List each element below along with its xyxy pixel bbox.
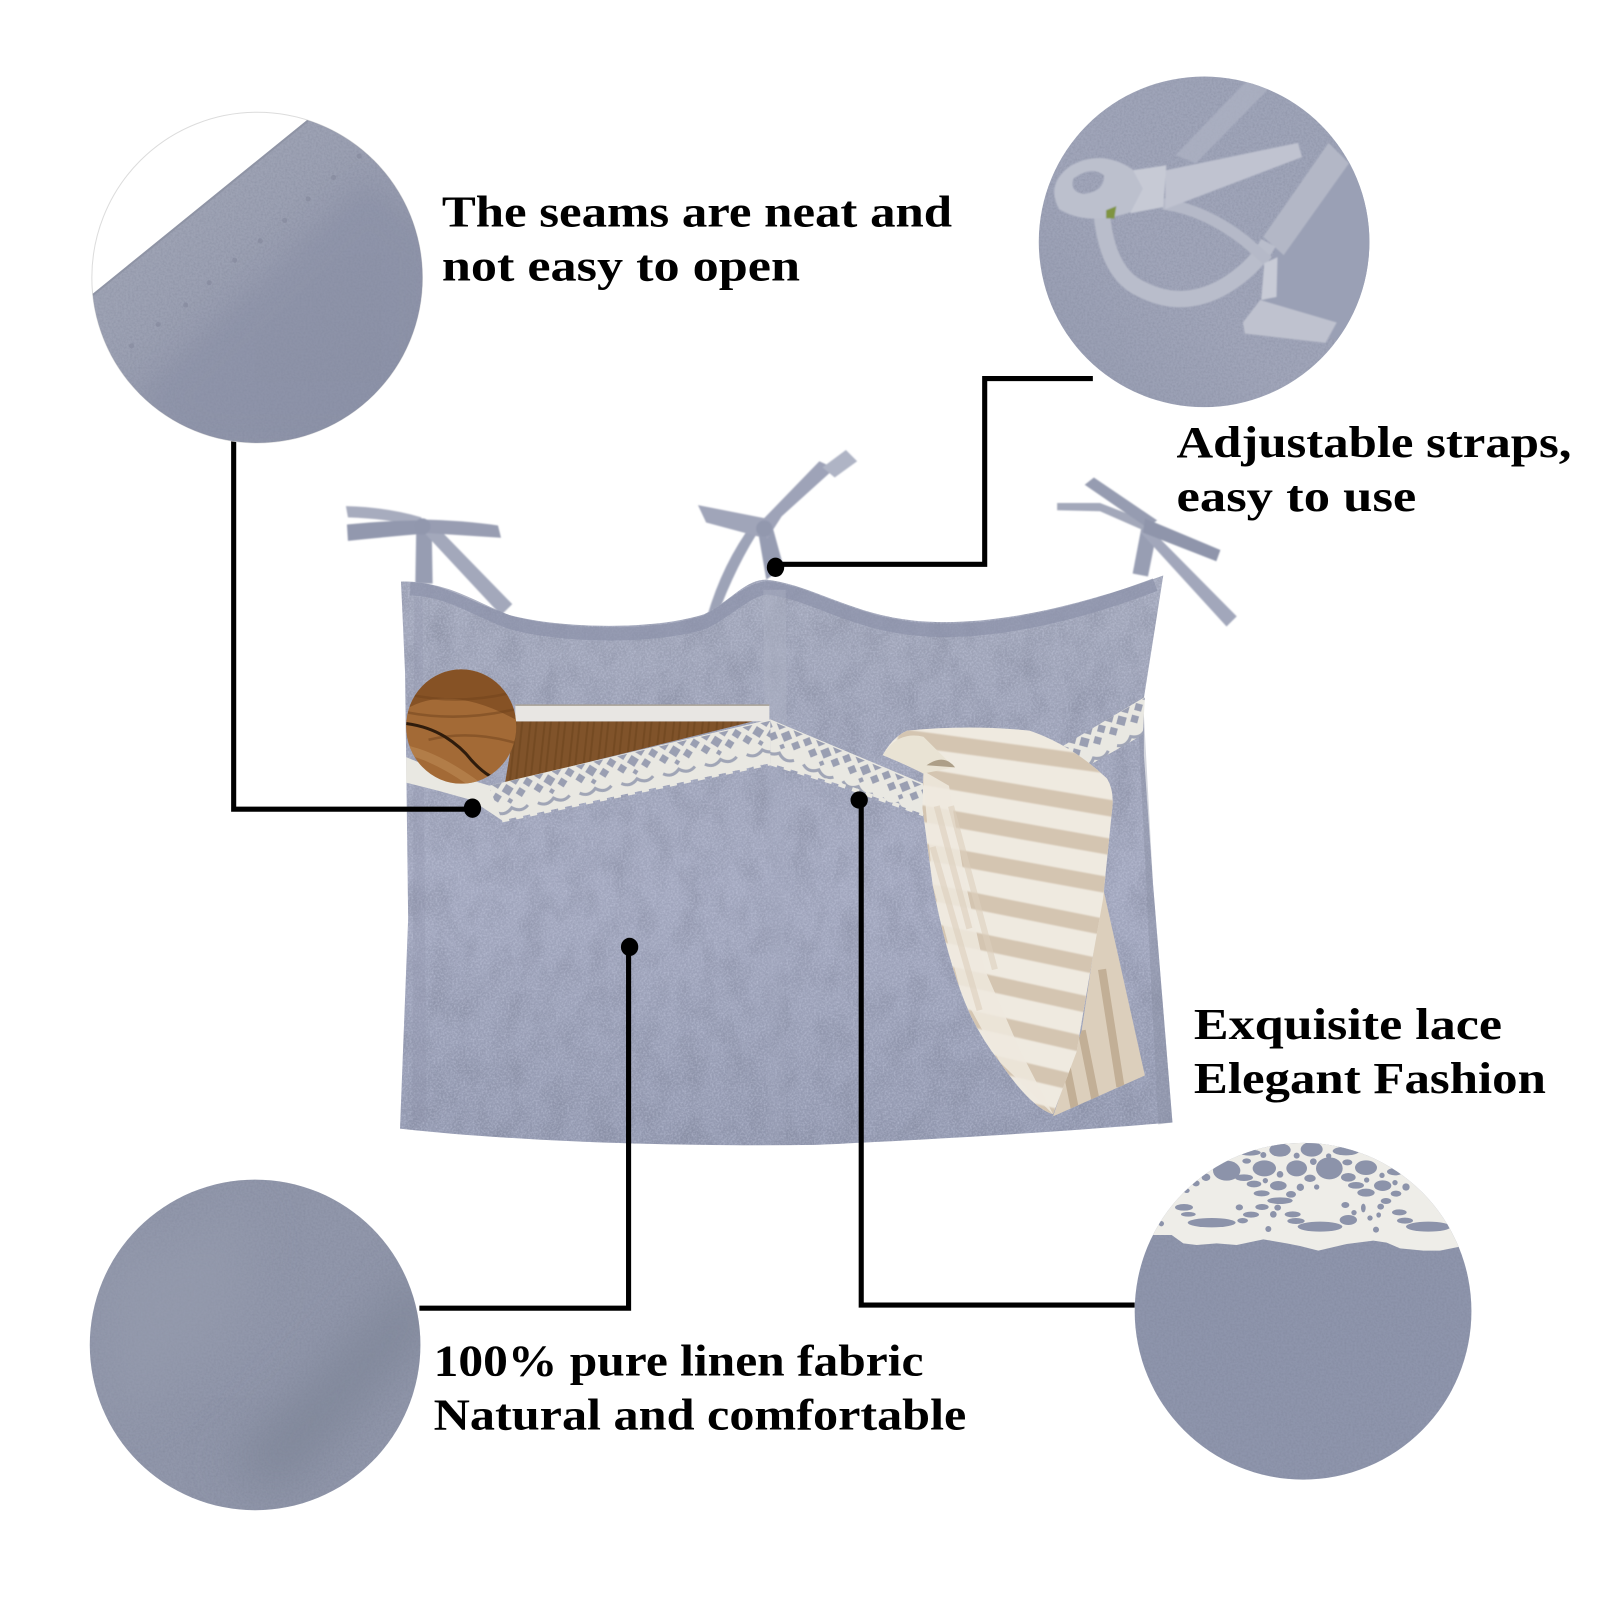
text: lace: Elegant Fashion (1194, 1053, 1546, 1103)
bow: middle tie (698, 450, 857, 618)
text: straps: easy to use (1177, 471, 1416, 521)
text: lace (1194, 999, 1546, 1103)
text: straps (1177, 417, 1571, 521)
centre seam lower (766, 760, 786, 1141)
text: linen fabric (434, 1336, 966, 1440)
callout dot: seams (464, 798, 481, 818)
towel back flap (1053, 892, 1145, 1116)
wooden spoon (406, 669, 516, 784)
bag body (400, 576, 1172, 1145)
lace trim: left end behind spoon (406, 757, 502, 820)
panel: hanging linen storage bag (346, 450, 1237, 1145)
circle: adjustable strap close-up (1036, 73, 1372, 410)
callout line: lace (861, 800, 1135, 1305)
centre seam (763, 590, 787, 727)
lace edge and holes (1153, 1143, 1458, 1251)
bow: right tie (1057, 478, 1237, 627)
callout line: seams (234, 441, 472, 809)
circle: seam close-up (82, 112, 439, 449)
text: seams: The seams are neat and (442, 187, 952, 237)
circle: linen fabric close-up (87, 1177, 439, 1513)
striped towel (882, 728, 1145, 1116)
top hem (410, 585, 1155, 634)
towel front (882, 728, 1113, 1114)
left side seam (412, 597, 427, 1122)
book in pocket (505, 705, 769, 783)
callout dot: lace (851, 791, 868, 809)
callout line: straps (776, 379, 1093, 564)
text: straps: Adjustable straps, (1177, 417, 1571, 467)
circle: lace close-up (1134, 1142, 1472, 1480)
text: linen fabric: 100% pure linen fabric (434, 1336, 923, 1386)
bow: left tie (346, 506, 512, 615)
right side shade (1138, 714, 1172, 1124)
text: seams (442, 187, 952, 291)
text: seams: not easy to open (442, 241, 800, 291)
callout line: fabric (419, 947, 629, 1308)
callout dot: fabric (621, 938, 638, 956)
text: lace: Exquisite lace (1194, 999, 1502, 1049)
text: linen fabric: Natural and comfortable (434, 1390, 966, 1440)
lace trim (489, 697, 1145, 820)
callout dot: straps (767, 558, 784, 577)
